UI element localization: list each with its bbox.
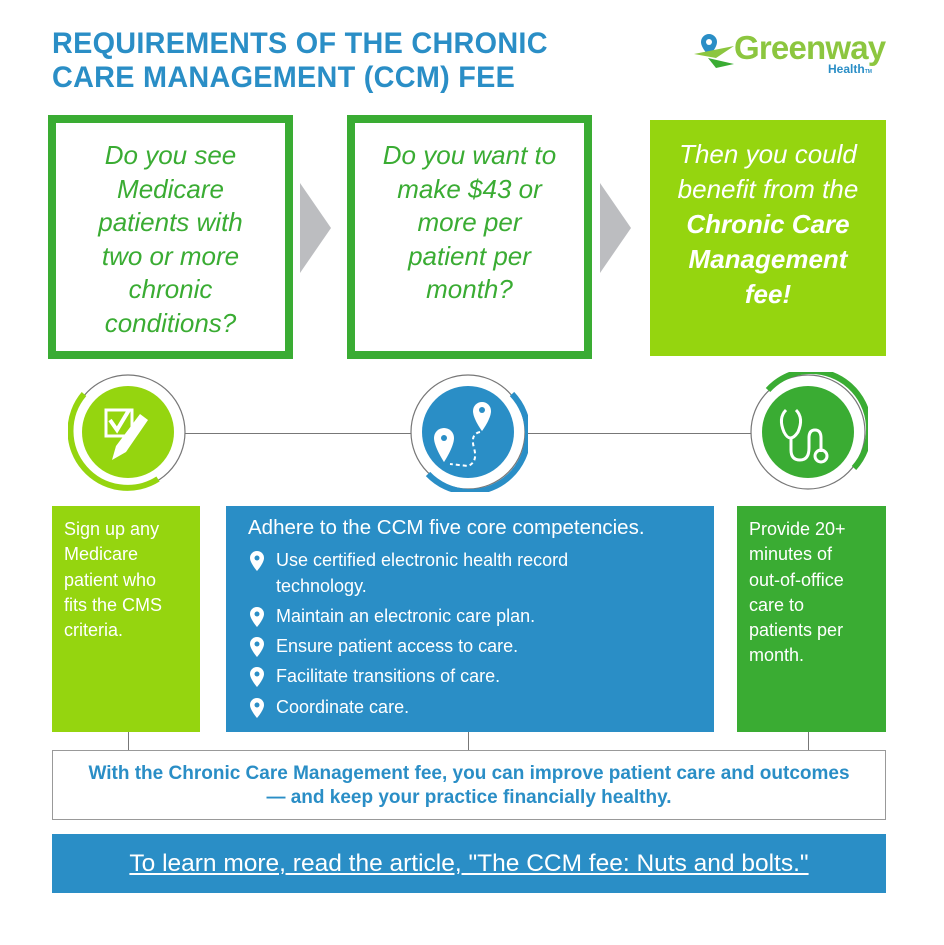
arrow 2 xyxy=(600,183,631,273)
conclusion box: Then you could xyxy=(679,139,857,169)
panel: core competencies xyxy=(226,506,714,732)
question box 1: two or more xyxy=(102,240,239,270)
icon: stethoscope xyxy=(750,372,868,490)
summary callout: — and keep your practice financially healthy. xyxy=(266,787,672,808)
footer link bar: To learn more, read the article, "The CCM fee: Nuts and bolts." xyxy=(129,850,809,877)
question box 1: Do you see xyxy=(105,140,236,170)
question box 2: make $43 or xyxy=(397,174,542,204)
question box 1: patients with xyxy=(98,207,243,237)
panel: core competencies: Adhere to the CCM five core competencies. xyxy=(248,516,645,539)
question box 2: Do you want to xyxy=(383,140,556,170)
question box 1 xyxy=(48,115,293,359)
panel: core competencies: Facilitate transitions of care. xyxy=(276,666,500,686)
question box 1: conditions? xyxy=(105,308,236,338)
panel: core competencies: Use certified electronic health record technology. xyxy=(276,550,568,596)
conclusion box: Chronic Care xyxy=(686,209,850,239)
footer link bar xyxy=(52,834,886,893)
icon: checklist pen xyxy=(68,374,186,491)
panel: core competencies: Ensure patient access to care. xyxy=(276,636,518,656)
question box 1: chronic xyxy=(129,274,212,304)
conclusion box: Management xyxy=(689,244,847,274)
question box 2: patient per xyxy=(408,240,531,270)
logo: Greenway Health: Greenway xyxy=(734,29,885,66)
summary callout: With the Chronic Care Management fee, you can improve patient care and outcomes xyxy=(88,763,850,784)
panel: core competencies: Coordinate care. xyxy=(276,697,409,717)
icon: map pins xyxy=(410,374,528,492)
question box 2: month? xyxy=(426,274,513,304)
title: CARE MANAGEMENT (CCM) FEE xyxy=(52,61,515,94)
panel: out-of-office care xyxy=(737,506,886,732)
panel: sign up: Sign up any Medicare patient who fits the CMS criteria. xyxy=(64,519,162,640)
summary callout xyxy=(52,750,886,820)
connector line xyxy=(180,433,760,434)
panel: core competencies: Maintain an electronic care plan. xyxy=(276,606,535,626)
panel: out-of-office care: Provide 20+ minutes of out-of-office care to patients per month. xyxy=(749,519,846,665)
logo: Greenway Health xyxy=(694,29,886,76)
arrow 1 xyxy=(300,183,331,273)
conclusion box: benefit from the xyxy=(678,174,858,204)
title: REQUIREMENTS OF THE CHRONIC xyxy=(52,27,548,60)
question box 2 xyxy=(347,115,592,359)
question box 1: Medicare xyxy=(117,174,224,204)
conclusion box xyxy=(650,120,886,356)
logo: Greenway Health: HealthTM xyxy=(828,62,872,76)
panel: sign up xyxy=(52,506,200,732)
question box 2: more per xyxy=(417,207,522,237)
conclusion box: fee! xyxy=(745,279,791,309)
title xyxy=(52,27,548,94)
